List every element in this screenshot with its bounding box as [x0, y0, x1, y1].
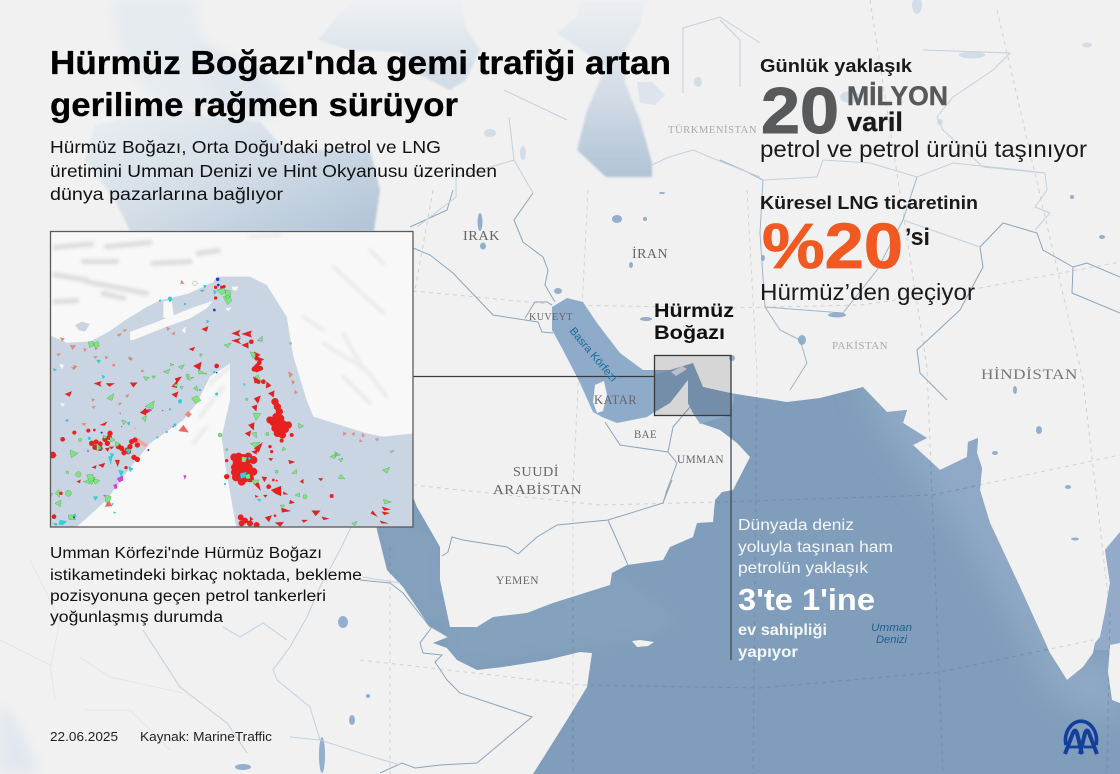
- Sri Lanka: [1108, 643, 1120, 703]
- inset relief: [55, 235, 387, 443]
- country borders: [360, 160, 1120, 773]
- ship tracks: salmon: [57, 280, 378, 507]
- subtitle: dünya pazarlarına bağlıyor: [50, 184, 283, 204]
- strait label: [654, 301, 734, 344]
- sea label: Umman Denizi: [871, 622, 912, 646]
- title: gerilime rağmen sürüyor: [50, 86, 458, 123]
- stat: 20 million barrels: varil: [847, 107, 903, 137]
- faint northern seas: [0, 0, 665, 774]
- stat: 20 percent LNG: ’si: [905, 224, 930, 251]
- subtitle: üretimini Umman Denizi ve Hint Okyanusu üzerinden: [50, 161, 497, 181]
- faint northern borders: [143, 17, 1050, 765]
- footer: date and source: [50, 730, 272, 744]
- stat: 20 percent LNG: Küresel LNG ticaretinin: [760, 192, 978, 213]
- strait label: Hürmüz: [654, 301, 734, 322]
- inset caption: [50, 545, 362, 626]
- continental shelf shading: [360, 367, 1120, 774]
- ship tracks: red arrows: [50, 326, 390, 527]
- inset caption: Umman Körfezi'nde Hürmüz Boğazı: [50, 545, 322, 562]
- graticule over sea: [390, 397, 1110, 774]
- footer: date and source: Kaynak: MarineTraffic: [140, 730, 272, 744]
- country labels: SUUDİ: [513, 464, 559, 480]
- Socotra: [632, 640, 654, 647]
- callout: crude oil share: [738, 517, 893, 661]
- callout: crude oil share: yoluyla taşınan ham: [738, 539, 893, 556]
- country labels: YEMEN: [496, 573, 539, 587]
- stat: 20 million barrels: MİLYON: [847, 81, 948, 111]
- footer: date and source: 22.06.2025: [50, 730, 118, 744]
- inset caption: pozisyonuna geçen petrol tankerleri: [50, 588, 326, 605]
- country labels: PAKİSTAN: [832, 340, 888, 352]
- title: Hürmüz Boğazı'nda gemi trafiği artan: [50, 44, 671, 81]
- inset islands: [59, 287, 238, 407]
- highlighted strait box: [654, 355, 731, 416]
- ship tracks: cyan: [53, 285, 261, 526]
- strait label: Boğazı: [654, 323, 725, 344]
- inset sea: [50, 277, 415, 530]
- callout: crude oil share: Dünyada deniz: [738, 517, 854, 534]
- country labels: KATAR: [594, 392, 637, 407]
- connector: inset to strait: [413, 376, 654, 378]
- subtitle: Hürmüz Boğazı, Orta Doğu'daki petrol ve LNG: [50, 137, 441, 157]
- inland lakes: [235, 192, 1105, 773]
- callout: crude oil share: petrolün yaklaşık: [738, 560, 868, 577]
- Qatar: [593, 381, 607, 413]
- stat: 20 million barrels: petrol ve petrol ürünü taşınıyor: [760, 136, 1087, 162]
- ship tracks: blue: [73, 278, 220, 518]
- inset caption: yoğunlaşmış durumda: [50, 609, 223, 626]
- country labels: ARABİSTAN: [493, 482, 582, 498]
- inset caption: istikametindeki birkaç noktada, bekleme: [50, 567, 362, 584]
- title: [50, 44, 671, 123]
- sea label: Umman Denizi: Umman: [871, 622, 912, 634]
- stat: 20 million barrels: Günlük yaklaşık: [760, 55, 913, 76]
- stat: 20 percent LNG: Hürmüz’den geçiyor: [760, 279, 975, 305]
- stat: 20 percent LNG: [760, 192, 978, 305]
- country labels: İRAN: [632, 246, 668, 262]
- country labels: [463, 124, 1078, 587]
- sea label: Umman Denizi: Denizi: [876, 634, 908, 646]
- ship tracks: red blobs: [92, 287, 288, 525]
- country labels: KUVEYT: [529, 311, 573, 323]
- callout: crude oil share: yapıyor: [738, 644, 798, 661]
- country labels: TÜRKMENİSTAN: [668, 124, 757, 136]
- northern lakes: [484, 0, 1092, 160]
- ocean: Arabian Sea: [373, 380, 1120, 774]
- stat: 20 million barrels: 20: [761, 74, 839, 147]
- stat: 20 million barrels: [760, 55, 1087, 162]
- country labels: IRAK: [463, 229, 500, 244]
- Persian Gulf: [552, 298, 735, 424]
- country labels: UMMAN: [677, 452, 724, 466]
- country labels: BAE: [634, 427, 657, 441]
- icon: AA logo: [1065, 721, 1097, 754]
- callout: crude oil share: 3'te 1'ine: [738, 582, 875, 617]
- callout: crude oil share: ev sahipliği: [738, 622, 827, 639]
- country labels: HİNDİSTAN: [981, 367, 1078, 383]
- subtitle: [50, 137, 497, 204]
- vertical rule: callout: [730, 415, 732, 660]
- sea label: Basra Körfezi: Basra Körfezi: [567, 325, 619, 384]
- ship tracks: green: [50, 288, 394, 526]
- ship tracks: magenta: [87, 408, 187, 497]
- stat: 20 percent LNG: %20: [762, 210, 903, 282]
- panel: inset ship traffic map: [49, 231, 415, 530]
- graticule: [360, 0, 1120, 774]
